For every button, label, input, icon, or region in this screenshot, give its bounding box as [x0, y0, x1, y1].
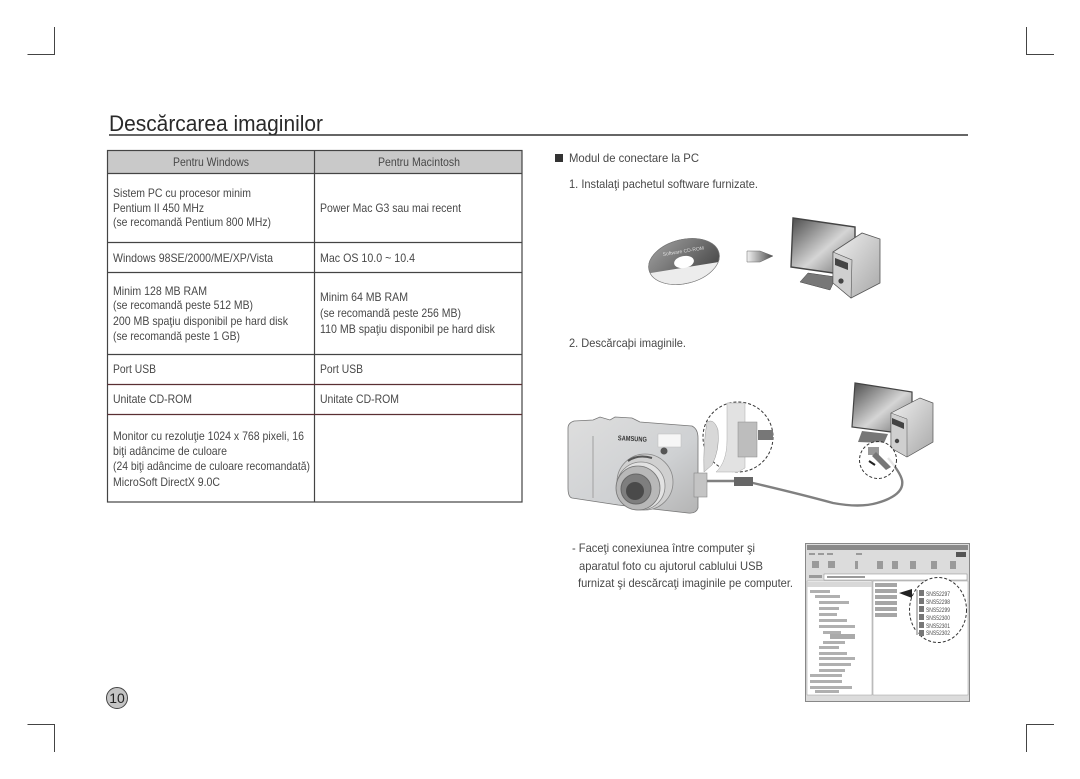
row: monitor and DirectX: MicroSoft DirectX 9.0C: [113, 475, 220, 489]
zoomed file list callout: SNS52299: [926, 607, 950, 614]
row: memory and disk: 110 MB spaţiu disponibil pe hard disk: [320, 322, 496, 336]
callout: computer USB port: [860, 442, 896, 478]
step 1 text: 1. Instalaţi pachetul software furnizate.: [569, 177, 758, 191]
table header: Pentru Windows: [173, 155, 249, 169]
window title bar: [807, 545, 968, 550]
transfer instructions: [572, 541, 793, 590]
row: processor: Power Mac G3 sau mai recent: [320, 201, 462, 215]
zoomed file list callout: SNS52301: [926, 623, 950, 630]
row: processor: (se recomandă Pentium 800 MHz): [113, 215, 271, 229]
menu and toolbar: [809, 552, 967, 580]
zoomed file list callout: SNS52300: [926, 615, 950, 622]
system requirements table: [108, 150, 522, 502]
connection heading: Modul de conectare la PC: [569, 151, 699, 165]
row: CD-ROM: Unitate CD-ROM: [113, 392, 192, 406]
files pane: [873, 581, 968, 695]
row: processor: [113, 186, 462, 229]
zoomed file list callout: SNS52302: [926, 630, 950, 637]
row: CD-ROM: Unitate CD-ROM: [320, 392, 399, 406]
row: memory and disk: (se recomandă peste 256 MB): [320, 306, 461, 320]
zoomed file list callout: SNS52297: [926, 591, 950, 598]
zoomed file list callout: SNS52298: [926, 599, 950, 606]
row: USB port: Port USB: [113, 362, 156, 376]
row: monitor and DirectX: biţi adâncime de culoare: [113, 444, 227, 458]
row: monitor and DirectX: Monitor cu rezoluţie 1024 x 768 pixeli, 16: [113, 429, 304, 443]
icon: digital camera: SAMSUNG: [618, 435, 647, 444]
row: memory and disk: Minim 64 MB RAM: [320, 290, 408, 304]
USB cable: [707, 458, 902, 506]
illustration: camera connected to computer: [568, 383, 933, 513]
page number: [106, 688, 128, 708]
row: monitor and DirectX: (24 biţi adâncime de culoare recomandată): [113, 459, 310, 473]
transfer instructions: aparatul foto cu ajutorul cablului USB: [579, 559, 763, 573]
row: operating system: Mac OS 10.0 ~ 10.4: [320, 251, 415, 265]
row: operating system: Windows 98SE/2000/ME/XP/Vista: [113, 251, 273, 265]
row: USB port: [113, 362, 363, 376]
arrow: install: [747, 251, 773, 262]
transfer instructions: furnizat şi descărcaţi imaginile pe computer.: [578, 576, 793, 590]
table header: [173, 155, 460, 169]
table header: Pentru Macintosh: [378, 155, 460, 169]
row: processor: Pentium II 450 MHz: [113, 201, 204, 215]
icon: software CD: [648, 238, 720, 285]
title: Descărcarea imaginilor: [109, 111, 323, 136]
zoomed file list callout: [899, 578, 966, 642]
row: memory and disk: 200 MB spaţiu disponibil pe hard disk: [113, 314, 289, 328]
screenshot: file explorer window: [806, 544, 970, 702]
row: monitor and DirectX: [113, 429, 310, 489]
icon: software CD: Software CD-ROM: [662, 246, 704, 258]
row: processor: Sistem PC cu procesor minim: [113, 186, 251, 200]
row: memory and disk: (se recomandă peste 512 MB): [113, 298, 253, 312]
USB plug on camera: [694, 473, 707, 497]
row: operating system: [113, 251, 415, 265]
callout: camera USB port: [703, 402, 773, 472]
icon: desktop computer: [791, 218, 880, 298]
step 2 text: 2. Descărcaþi imaginile.: [569, 336, 686, 350]
row: memory and disk: (se recomandă peste 1 GB): [113, 329, 240, 343]
folders pane: [807, 581, 872, 695]
transfer instructions: - Faceţi conexiunea între computer şi: [572, 541, 755, 555]
row: memory and disk: [113, 284, 496, 343]
icon: digital camera: [568, 417, 698, 513]
row: memory and disk: Minim 128 MB RAM: [113, 284, 207, 298]
row: USB port: Port USB: [320, 362, 363, 376]
icon: computer: [852, 383, 933, 457]
row: CD-ROM: [113, 392, 399, 406]
page number: 10: [109, 690, 125, 706]
